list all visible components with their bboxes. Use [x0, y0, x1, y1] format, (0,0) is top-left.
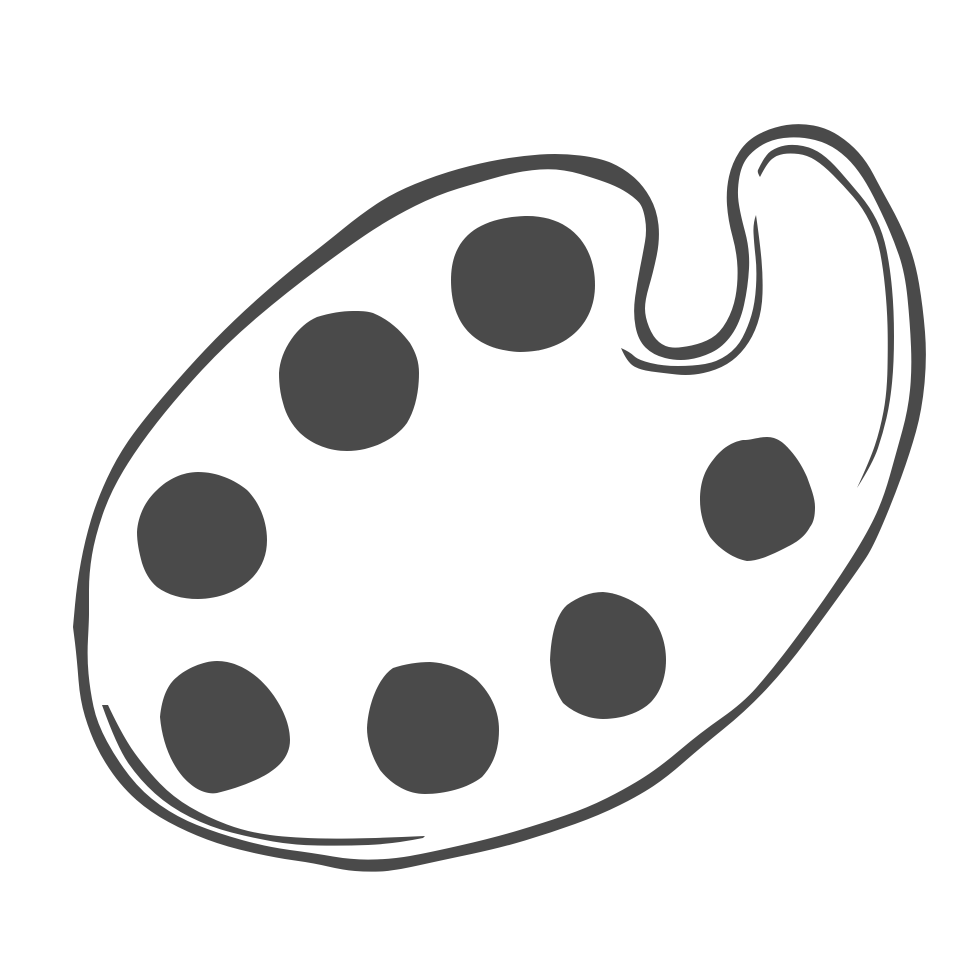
paint well 2: [279, 311, 419, 451]
paint well 7: [700, 437, 815, 561]
palette outline and highlights: [73, 124, 926, 872]
paint well 4: [160, 661, 290, 793]
main palette outline: [73, 124, 926, 872]
paint well 5: [367, 662, 499, 794]
inner highlight: lower edge: [102, 705, 425, 846]
inner highlight: thumb notch: [621, 215, 763, 375]
paint well 1: [451, 216, 595, 352]
paint well 3: [137, 472, 267, 599]
inner highlight: handle: [758, 145, 894, 488]
paint well 6: [550, 592, 666, 719]
paint wells: [137, 216, 815, 794]
